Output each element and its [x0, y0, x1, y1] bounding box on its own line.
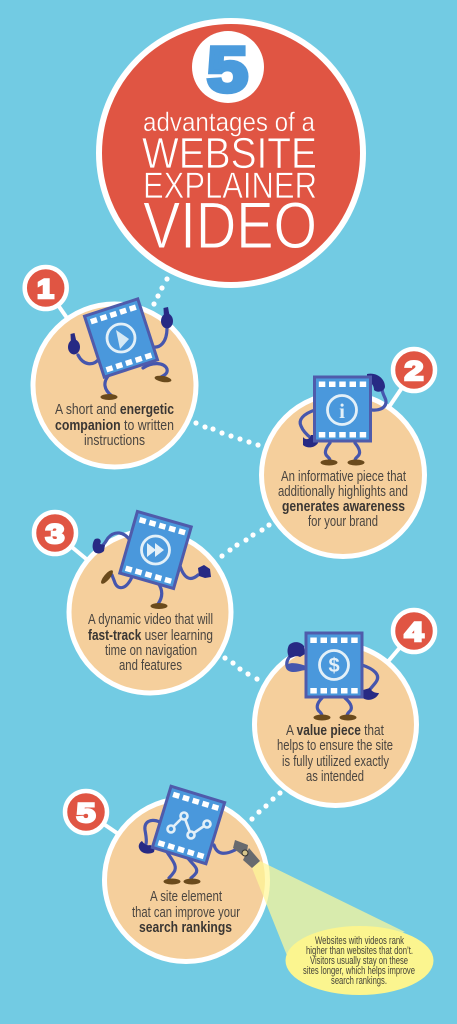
text 4: is fully utilized exactly	[282, 754, 390, 770]
character 4: $	[328, 655, 340, 677]
title text: VIDEO	[143, 188, 317, 262]
badge 1	[25, 267, 67, 309]
character 2: i	[339, 399, 345, 423]
panel: advantage 3	[34, 512, 231, 693]
text 3: and features	[119, 658, 182, 674]
character 3	[93, 512, 211, 609]
panel: advantage 2	[262, 349, 435, 556]
text 2: additionally highlights and	[278, 484, 408, 500]
badge 1: 1	[37, 274, 54, 304]
text 5	[132, 889, 240, 936]
text 4: A value piece that	[286, 723, 384, 739]
text 2: for your brand	[308, 514, 378, 530]
text 2	[278, 469, 408, 530]
callout: search ranking note: search rankings.	[331, 975, 387, 987]
character 4	[287, 633, 379, 720]
text 1: instructions	[84, 433, 145, 449]
badge 5: 5	[76, 798, 96, 828]
badge 2	[393, 349, 435, 391]
text 5: search rankings	[139, 920, 232, 936]
text 5: A site element	[150, 889, 222, 905]
dotted connector lines	[151, 276, 283, 822]
icon: flashlight	[233, 840, 260, 868]
text 4: helps to ensure the site	[277, 738, 393, 754]
text 4	[277, 723, 393, 785]
panel: advantage 5	[65, 786, 405, 962]
callout: search ranking note: higher than websites that don’t.	[306, 945, 413, 957]
text 1: companion to written	[55, 418, 174, 434]
title text	[142, 107, 317, 262]
text 1: A short and energetic	[55, 402, 174, 418]
callout: search ranking note	[286, 926, 434, 995]
callout: search ranking note: Websites with videos rank	[315, 935, 404, 947]
badge 3: 3	[46, 519, 64, 549]
number five in white circle: 5	[207, 34, 248, 106]
title text: EXPLAINER	[143, 165, 317, 206]
panel: advantage 1	[25, 267, 196, 467]
title badge	[99, 21, 363, 285]
number five in white circle	[192, 31, 264, 106]
text 3: time on navigation	[105, 643, 197, 659]
character 5	[139, 786, 235, 884]
callout: search ranking note: Visitors usually stay on these	[310, 955, 408, 967]
text 3: fast-track user learning	[88, 628, 213, 644]
title text: WEBSITE	[142, 130, 317, 178]
text 5: that can improve your	[132, 905, 240, 921]
panel: advantage 4	[254, 610, 435, 806]
text 1	[55, 402, 174, 449]
character 2	[300, 374, 386, 466]
text 2: generates awareness	[282, 499, 405, 515]
text 3	[88, 612, 213, 674]
badge 2: 2	[404, 356, 424, 386]
character 1	[68, 299, 173, 400]
badge 4	[393, 610, 435, 652]
text 4: as intended	[306, 769, 364, 785]
badge 3	[34, 512, 76, 554]
badge 5	[65, 791, 107, 833]
text 2: An informative piece that	[281, 469, 406, 485]
badge 4: 4	[404, 617, 424, 647]
spotlight beam	[252, 861, 405, 958]
text 3: A dynamic video that will	[88, 612, 213, 628]
title text: advantages of a	[143, 107, 316, 137]
